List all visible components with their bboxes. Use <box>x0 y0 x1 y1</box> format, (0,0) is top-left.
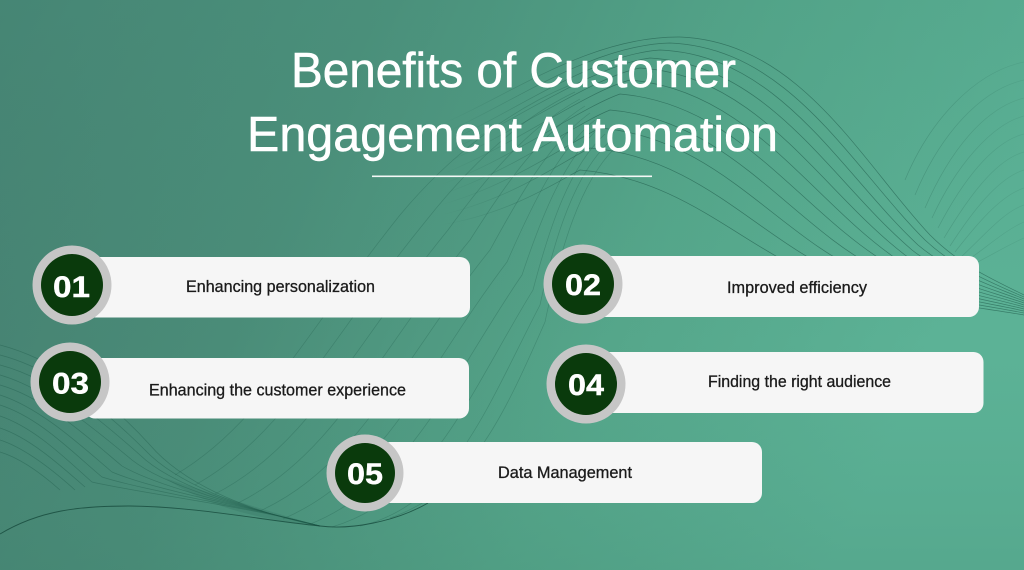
badge 02 <box>544 244 622 324</box>
label 02: Improved efficiency <box>727 279 868 297</box>
badge 03: 03 <box>52 368 89 400</box>
title: Benefits of Customer <box>291 44 736 98</box>
badge 01: 01 <box>53 271 90 304</box>
badge 05 <box>326 434 404 512</box>
title: Engagement Automation <box>247 108 778 162</box>
card 02: Improved efficiency <box>544 244 979 324</box>
badge 05: 05 <box>347 458 383 491</box>
title <box>247 44 778 162</box>
lower ridge curve <box>0 503 428 534</box>
badge 04: 04 <box>568 369 604 402</box>
card 04: Finding the right audience <box>546 344 984 424</box>
badge 01 <box>32 246 112 324</box>
label 01: Enhancing personalization <box>186 278 375 296</box>
badge 03 <box>30 342 110 422</box>
badge 02: 02 <box>565 269 601 302</box>
label 05: Data Management <box>498 464 632 482</box>
label 04: Finding the right audience <box>708 373 891 391</box>
card 05: Data Management <box>326 434 762 512</box>
label 03: Enhancing the customer experience <box>149 382 406 400</box>
badge 04 <box>546 344 626 424</box>
title underline <box>372 176 652 177</box>
card 01: Enhancing personalization <box>32 246 470 324</box>
card 03: Enhancing the customer experience <box>30 342 469 422</box>
